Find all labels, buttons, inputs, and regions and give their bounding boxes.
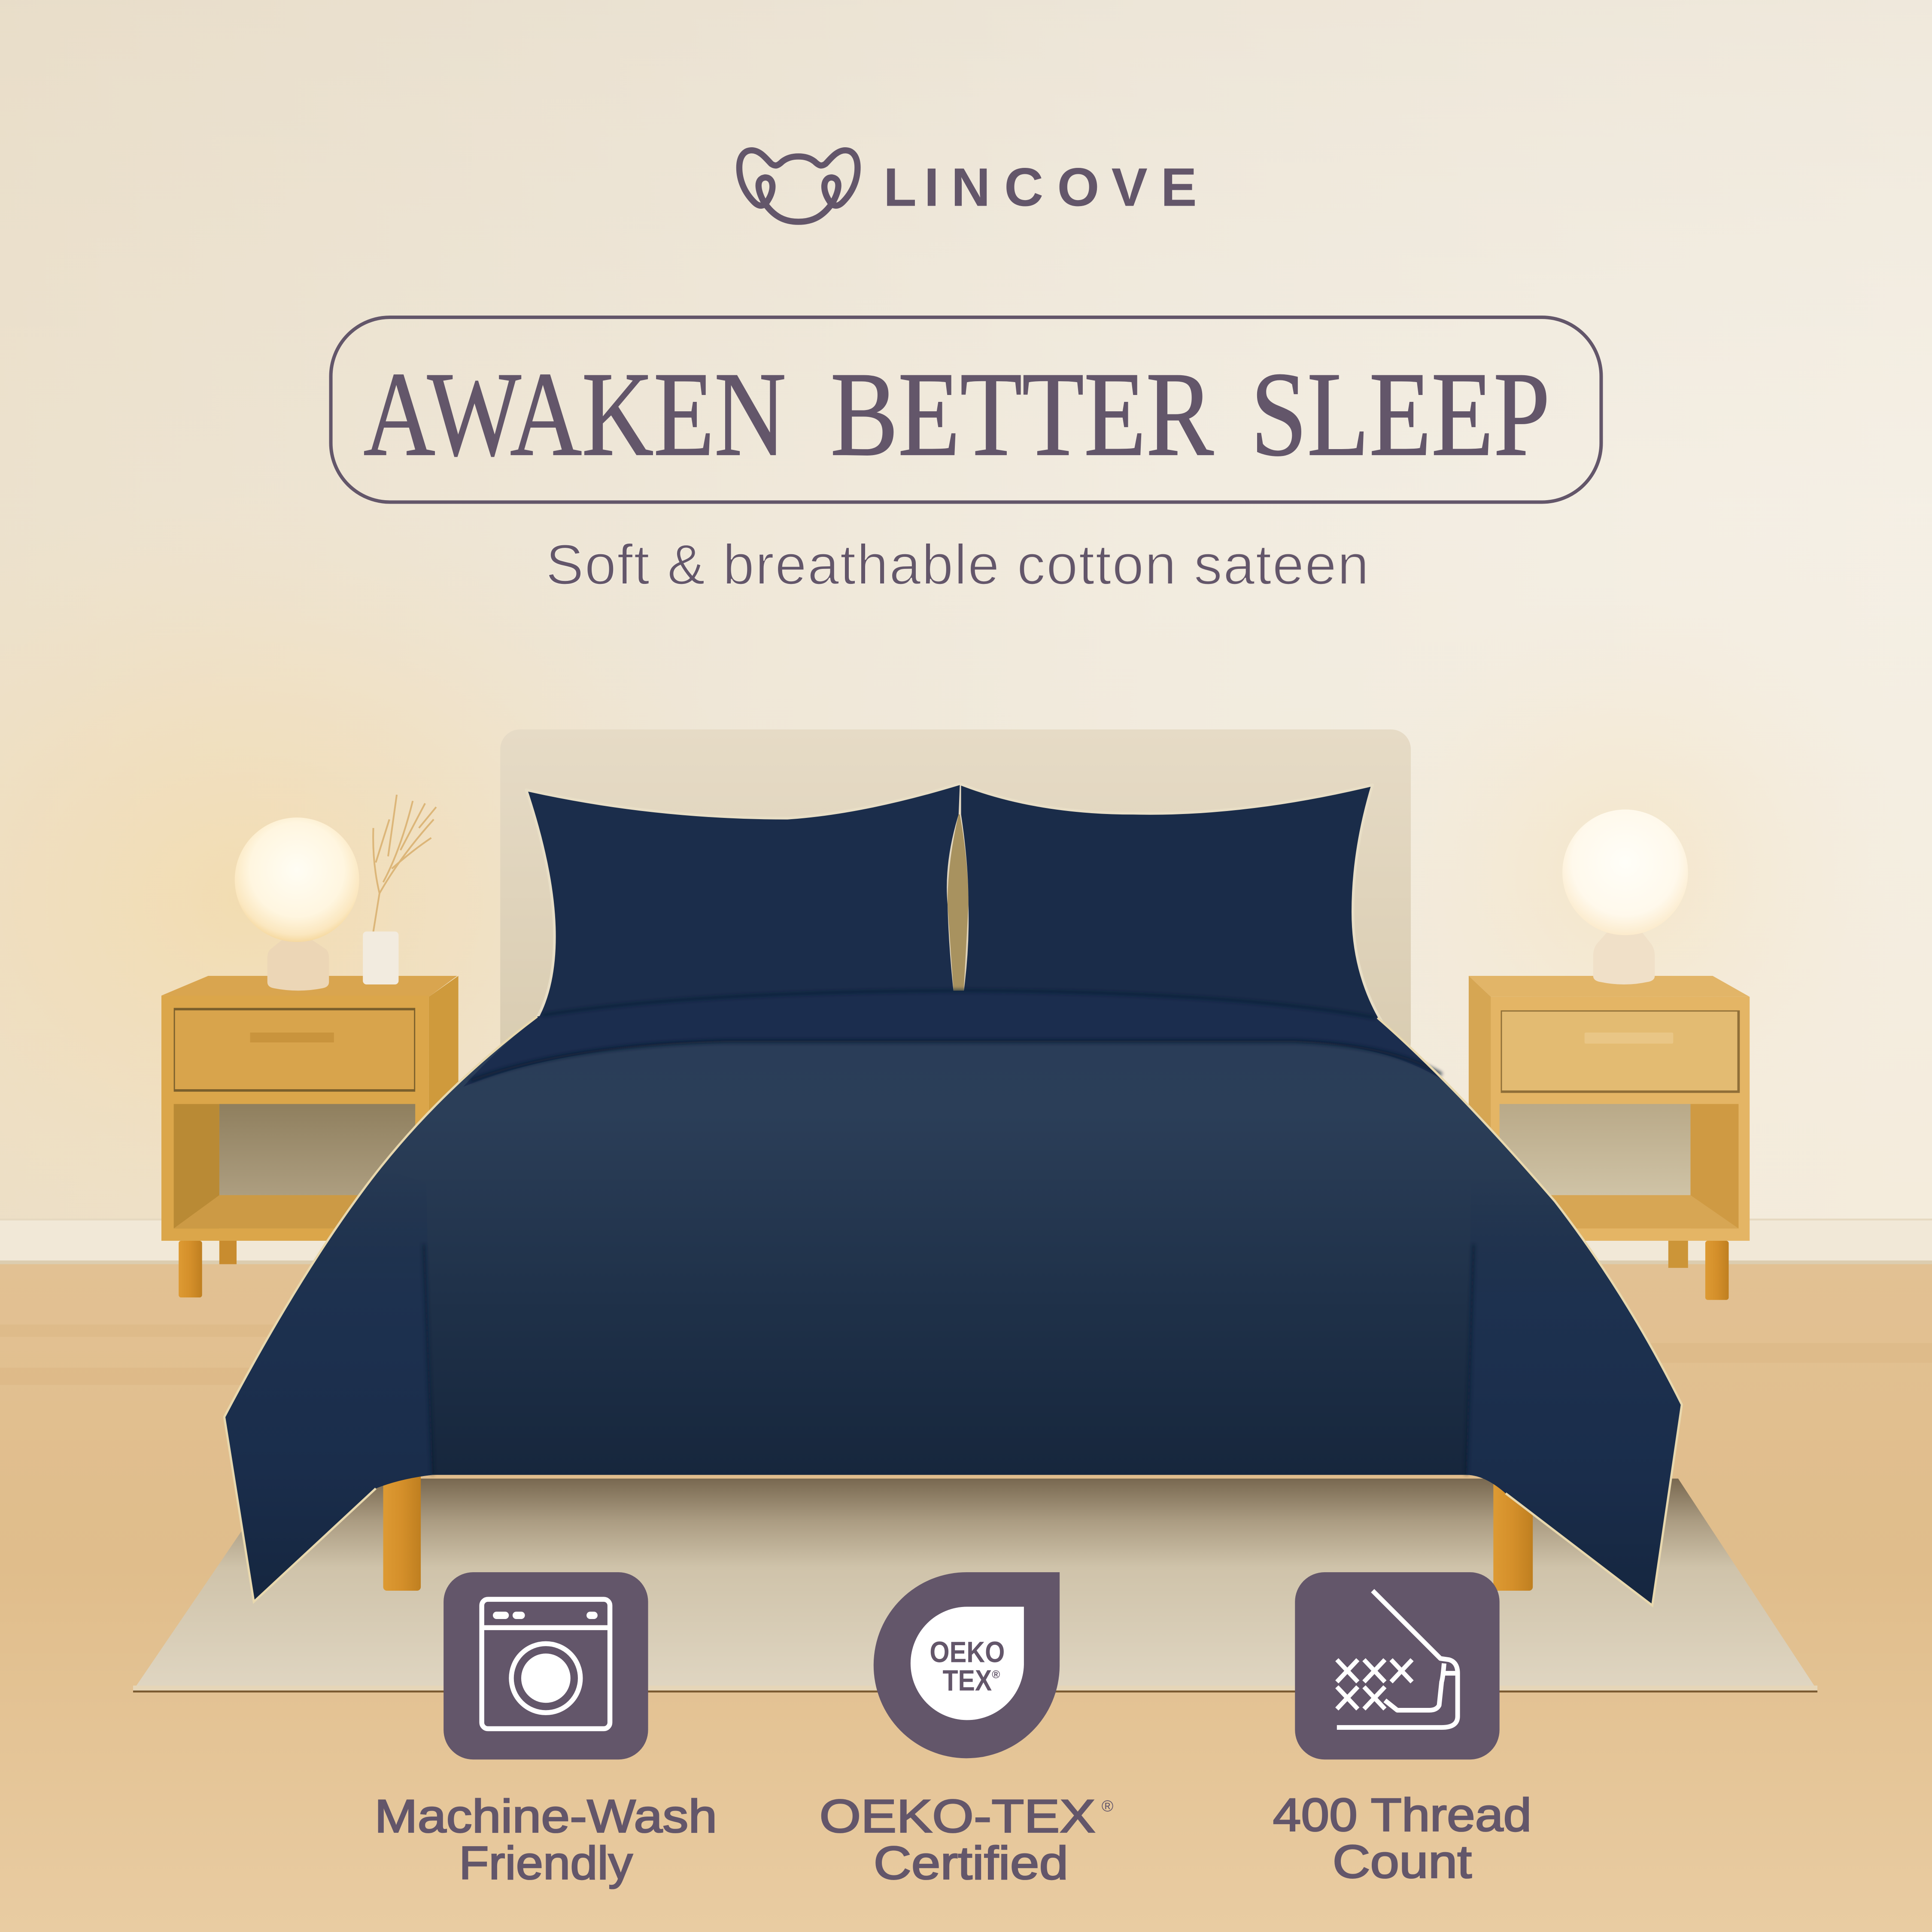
front leg — [1705, 1241, 1728, 1300]
back leg — [1668, 1238, 1688, 1268]
duvet body — [224, 990, 1682, 1605]
top fold band — [463, 990, 1449, 1087]
duvet edge piping — [224, 1017, 1682, 1605]
left nightstand — [161, 976, 459, 1297]
oeko-tex icon — [874, 1572, 1060, 1758]
washer door — [511, 1643, 580, 1713]
top surface — [161, 976, 457, 997]
top surface — [1469, 976, 1750, 997]
open shelf back wall — [219, 1104, 415, 1195]
label: oeko-tex certified: Certified — [874, 1837, 1068, 1889]
fold lines — [424, 1245, 1473, 1475]
right nightstand — [1469, 976, 1750, 1300]
title pill — [331, 317, 1601, 502]
drawer — [1501, 1010, 1740, 1093]
label: machine-wash friendly: Friendly — [459, 1837, 633, 1889]
pillow piping — [526, 784, 1382, 1023]
registered mark: ® — [992, 1669, 1000, 1681]
left corner drop — [224, 1168, 432, 1602]
open shelf back wall — [1500, 1104, 1691, 1195]
right corner drop — [1466, 1177, 1682, 1605]
right pillow — [961, 784, 1382, 1023]
label: oeko-tex certified: OEKO-TEX — [819, 1790, 1095, 1843]
left pillow — [526, 784, 960, 1023]
subtitle: Soft & breathable cotton sateen — [546, 532, 1369, 596]
back leg — [219, 1238, 237, 1264]
logo mark: elephant head — [739, 150, 857, 222]
right lamp — [1562, 810, 1688, 984]
title text: AWAKEN — [364, 347, 786, 481]
headboard — [500, 729, 1411, 1062]
washer body — [482, 1599, 610, 1728]
cross stitches — [1337, 1660, 1412, 1709]
band top shadow — [542, 990, 1375, 1018]
rug — [133, 1479, 1817, 1692]
oeko-tex badge wordmark: TEX — [942, 1664, 992, 1697]
needle and thread — [1337, 1591, 1458, 1728]
drawer handle — [250, 1033, 334, 1042]
drawer — [174, 1008, 415, 1092]
open shelf floor — [174, 1195, 415, 1228]
title text: SLEEP — [1251, 347, 1550, 481]
open shelf side — [174, 1104, 219, 1228]
pillows — [526, 784, 1382, 1023]
thread count icon — [1295, 1572, 1500, 1759]
drawer handle — [1585, 1033, 1673, 1044]
front leg — [179, 1241, 202, 1297]
open shelf side — [1691, 1104, 1738, 1228]
machine-wash icon — [444, 1572, 648, 1759]
front frame — [161, 996, 429, 1241]
label: machine-wash friendly: Machine-Wash — [374, 1790, 717, 1843]
side panel — [1469, 976, 1491, 1146]
oeko-tex badge wordmark: OEKO — [930, 1635, 1005, 1668]
left lamp — [235, 817, 359, 990]
brand logo — [739, 150, 1197, 222]
label: oeko-tex certified: ® — [1102, 1797, 1113, 1815]
front frame — [1491, 997, 1750, 1241]
label: 400 thread count: 400 Thread — [1273, 1789, 1531, 1841]
gap between pillows — [948, 814, 969, 993]
title text: BETTER — [830, 347, 1214, 481]
oeko-tex inner badge — [911, 1607, 1024, 1720]
logo wordmark: LINCOVE — [884, 157, 1197, 217]
top fold crease — [471, 1041, 1442, 1081]
duvet — [224, 990, 1682, 1605]
bed legs — [383, 1466, 1533, 1591]
side panel — [429, 976, 459, 1146]
open shelf floor — [1500, 1195, 1738, 1228]
label: 400 thread count: Count — [1333, 1836, 1472, 1888]
vase with dried branch — [363, 795, 436, 984]
